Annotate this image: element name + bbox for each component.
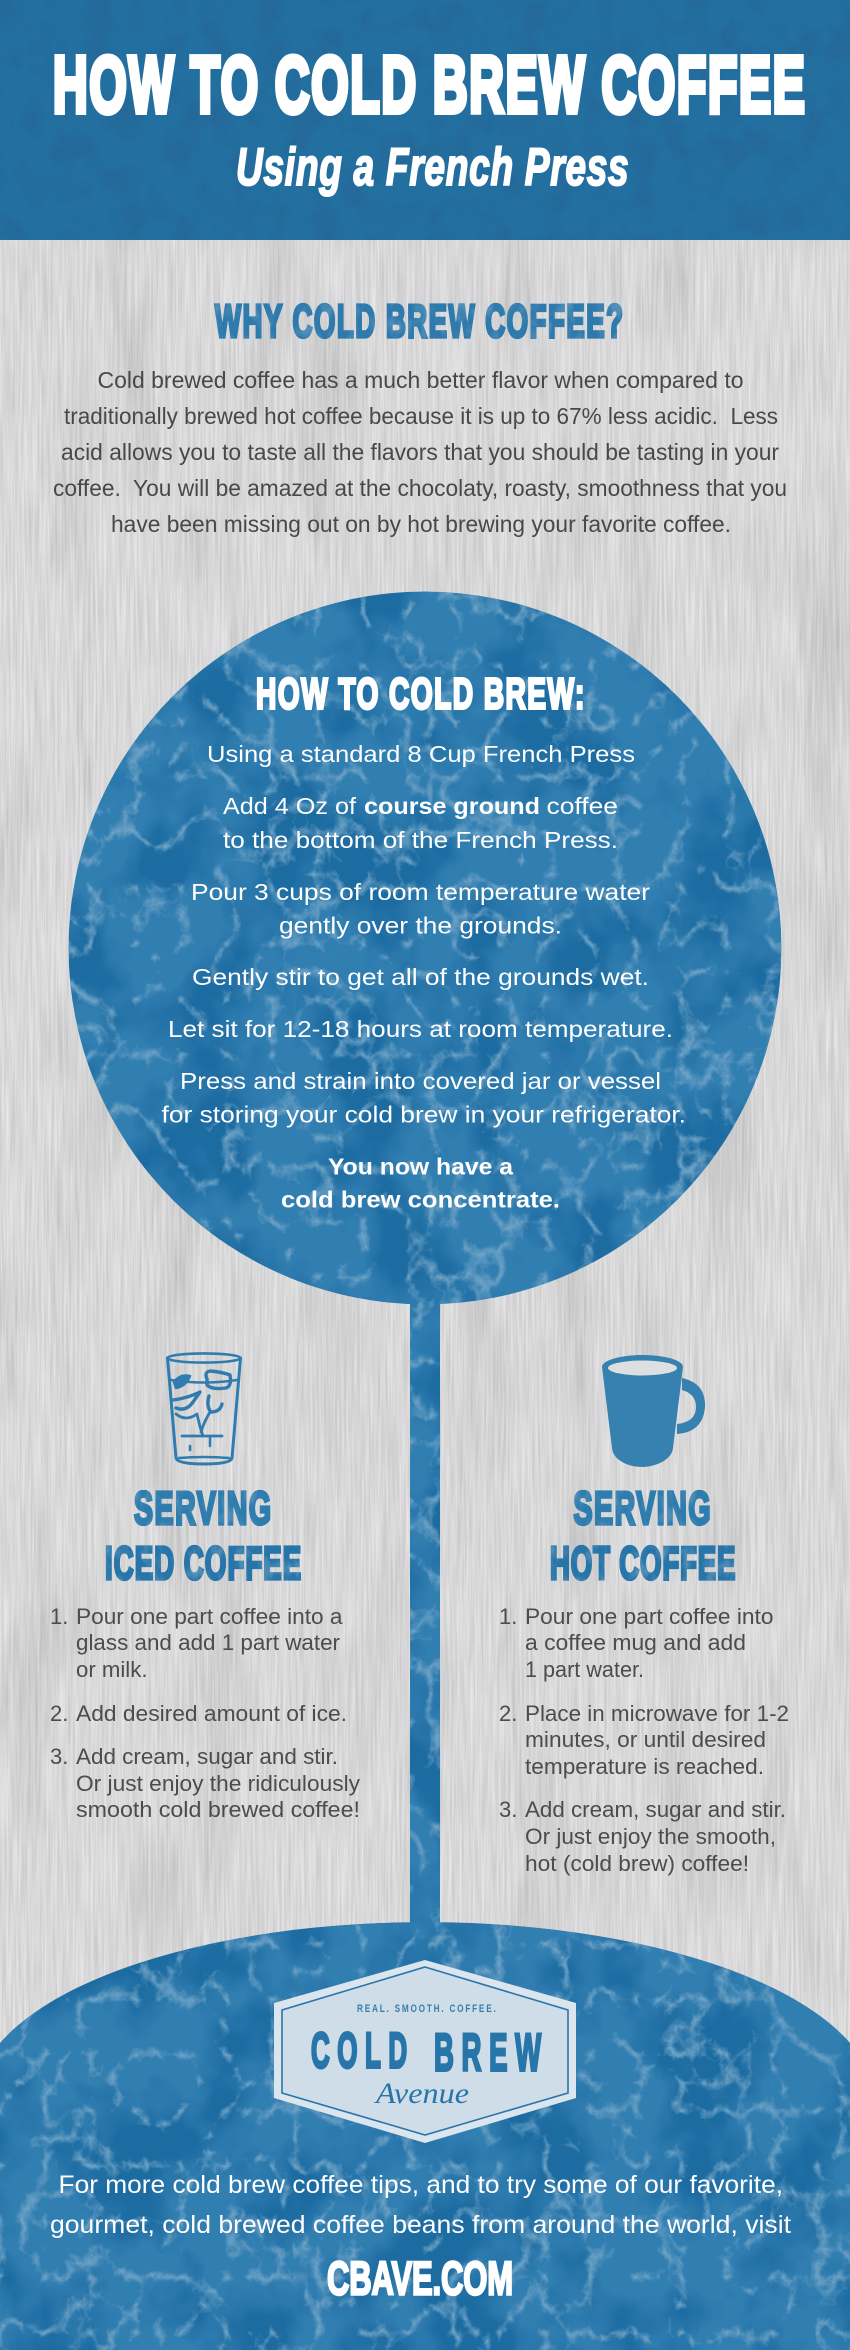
how to cold brew steps bbox=[162, 669, 686, 1212]
circle panel bbox=[68, 592, 782, 1304]
hot coffee instructions: Pour one part coffee into bbox=[525, 1604, 774, 1629]
heading: serving hot coffee bbox=[550, 1483, 735, 1590]
iced coffee instructions: 1. bbox=[50, 1604, 68, 1629]
hot coffee instructions: Add cream, sugar and stir. bbox=[525, 1797, 786, 1822]
intro paragraph: acid allows you to taste all the flavors that you should be tasting in your bbox=[61, 439, 779, 465]
hot coffee instructions: 2. bbox=[499, 1701, 517, 1726]
footer text bbox=[50, 2171, 791, 2239]
iced coffee instructions: Or just enjoy the ridiculously bbox=[76, 1771, 360, 1796]
badge inner outline bbox=[282, 1967, 568, 2135]
header banner bbox=[0, 0, 850, 240]
hot coffee instructions: 1 part water. bbox=[525, 1657, 644, 1682]
subtitle: Using a French Press bbox=[236, 137, 629, 197]
step: pour water: gently over the grounds. bbox=[279, 912, 562, 938]
iced coffee instructions: 2. bbox=[50, 1701, 68, 1726]
step: press and strain: Press and strain into covered jar or vessel bbox=[180, 1068, 661, 1094]
badge script: Avenue bbox=[374, 2077, 469, 2110]
step: add coffee: coffee bbox=[546, 793, 618, 819]
intro paragraph: traditionally brewed hot coffee because it is up to 67% less acidic. Less bbox=[64, 403, 778, 429]
intro paragraph: coffee. You will be amazed at the chocolaty, roasty, smoothness that you bbox=[53, 475, 787, 501]
hot coffee instructions: Place in microwave for 1-2 bbox=[525, 1701, 789, 1726]
hot coffee instructions: minutes, or until desired bbox=[525, 1727, 766, 1752]
iced coffee instructions: Add cream, sugar and stir. bbox=[76, 1744, 338, 1769]
panel: serving hot coffee bbox=[499, 1355, 789, 1876]
step: add coffee: Add 4 Oz of bbox=[223, 793, 356, 819]
heading: serving iced coffee bbox=[105, 1483, 301, 1590]
step: pour water bbox=[191, 879, 650, 938]
iced coffee instructions: 3. bbox=[50, 1744, 68, 1769]
section: why cold brew bbox=[53, 297, 787, 537]
footer call to action bbox=[50, 2171, 791, 2305]
badge tagline: REAL. SMOOTH. COFFEE. bbox=[357, 2003, 496, 2015]
stem connector bbox=[410, 1290, 440, 1950]
logo badge: cold brew avenue bbox=[274, 1960, 576, 2143]
heading: how to cold brew: HOW TO COLD BREW: bbox=[256, 669, 584, 718]
heading: serving iced coffee: SERVING bbox=[134, 1483, 271, 1535]
banner background bbox=[0, 0, 850, 240]
iced coffee instructions: smooth cold brewed coffee! bbox=[76, 1797, 360, 1822]
heading: why cold brew coffee: WHY COLD BREW COFFEE? bbox=[215, 297, 623, 348]
badge name: COLD bbox=[311, 2024, 407, 2079]
hot coffee instructions: Or just enjoy the smooth, bbox=[525, 1824, 776, 1849]
hot coffee instructions: temperature is reached. bbox=[525, 1754, 764, 1779]
heading: serving hot coffee: HOT COFFEE bbox=[550, 1539, 735, 1590]
hot coffee instructions: 1. bbox=[499, 1604, 517, 1629]
step: press and strain: for storing your cold brew in your refrigerator. bbox=[162, 1102, 686, 1128]
badge hexagon bbox=[274, 1960, 576, 2143]
hot coffee instructions: hot (cold brew) coffee! bbox=[525, 1851, 749, 1876]
step: pour water: Pour 3 cups of room temperature water bbox=[191, 879, 650, 905]
footer text: For more cold brew coffee tips, and to try some of our favorite, bbox=[58, 2171, 783, 2199]
step: add coffee: course ground bbox=[364, 793, 540, 819]
hot coffee instructions: 3. bbox=[499, 1797, 517, 1822]
heading: serving iced coffee: ICED COFFEE bbox=[105, 1539, 301, 1590]
step: let sit: Let sit for 12-18 hours at room temperature. bbox=[168, 1016, 673, 1042]
panel: serving iced coffee bbox=[50, 1353, 360, 1822]
intro paragraph: have been missing out on by hot brewing your favorite coffee. bbox=[111, 511, 731, 537]
iced coffee instructions bbox=[50, 1604, 360, 1822]
step: add coffee: to the bottom of the French Press. bbox=[223, 827, 618, 853]
footer dome panel bbox=[0, 1922, 850, 2350]
hot coffee instructions bbox=[499, 1604, 789, 1876]
closing note: concentrate: You now have a bbox=[328, 1154, 514, 1180]
closing note: concentrate bbox=[281, 1154, 560, 1212]
blue connected shapes bbox=[0, 592, 850, 2350]
iced coffee instructions: or milk. bbox=[76, 1657, 148, 1682]
website link: CBAVE.COM bbox=[327, 2253, 513, 2305]
intro paragraph: Cold brewed coffee has a much better flavor when compared to bbox=[98, 367, 744, 393]
hot coffee instructions: a coffee mug and add bbox=[525, 1630, 746, 1655]
step: stir: Gently stir to get all of the grounds wet. bbox=[192, 964, 649, 990]
closing note: concentrate: cold brew concentrate. bbox=[281, 1186, 560, 1212]
step: add coffee bbox=[223, 793, 618, 853]
badge name bbox=[311, 2023, 541, 2082]
title: HOW TO COLD BREW COFFEE bbox=[53, 39, 805, 129]
iced coffee instructions: Pour one part coffee into a bbox=[76, 1604, 343, 1629]
footer text: gourmet, cold brewed coffee beans from around the world, visit bbox=[50, 2211, 791, 2239]
badge name: BREW bbox=[434, 2023, 541, 2082]
step: standard press: Using a standard 8 Cup French Press bbox=[207, 741, 635, 767]
iced coffee instructions: glass and add 1 part water bbox=[76, 1630, 340, 1655]
heading: serving hot coffee: SERVING bbox=[574, 1483, 711, 1535]
icon: coffee mug bbox=[602, 1355, 705, 1467]
intro paragraph bbox=[53, 367, 787, 537]
iced coffee instructions: Add desired amount of ice. bbox=[76, 1701, 347, 1726]
icon: iced glass bbox=[168, 1353, 240, 1464]
step: press and strain bbox=[162, 1068, 686, 1128]
